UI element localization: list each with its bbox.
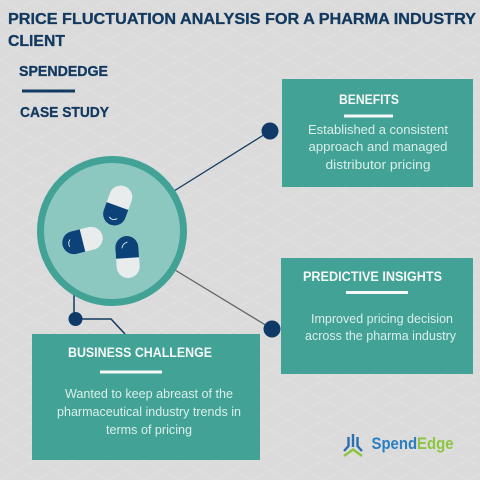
pill: lower — [115, 235, 140, 279]
subtitle: SpendEdge case study — [19, 63, 109, 121]
text: benefits body: approach and managed — [308, 139, 448, 154]
panel: predictive insights — [281, 258, 473, 374]
title: CLIENT — [8, 33, 65, 50]
heading: business challenge: BUSINESS CHALLENGE — [68, 345, 212, 360]
text: benefits body — [308, 122, 448, 172]
text: business challenge body: Wanted to keep abreast of the — [65, 386, 233, 401]
pill: upper — [100, 182, 135, 229]
subtitle: SpendEdge case study: SPENDEDGE — [19, 63, 108, 80]
text: business challenge body: pharmaceutical industry trends in — [57, 404, 241, 419]
text: benefits body: distributor pricing — [326, 157, 430, 172]
text: business challenge body: terms of pricing — [106, 422, 192, 437]
logo: SpendEdge: SpendEdge — [372, 434, 454, 453]
panel: benefits — [282, 79, 473, 187]
title — [8, 11, 476, 50]
text: predictive insights body — [305, 311, 456, 343]
heading: benefits: BENEFITS — [339, 92, 399, 107]
text: predictive insights body: Improved pricing decision — [311, 311, 453, 326]
connector: circle to predictive insights — [175, 270, 280, 338]
text: predictive insights body: across the pharma industry — [305, 328, 456, 343]
text: benefits body: Established a consistent — [308, 122, 448, 137]
panel: business challenge — [32, 334, 260, 460]
text: business challenge body — [57, 386, 241, 437]
connector: circle to benefits — [174, 122, 278, 191]
icon: pills in circle — [40, 160, 184, 302]
connector: circle to business challenge — [68, 295, 125, 334]
subtitle: SpendEdge case study: CASE STUDY — [20, 104, 109, 121]
icon: logo mark — [344, 434, 362, 456]
title: PRICE FLUCTUATION ANALYSIS FOR A PHARMA INDUSTRY — [8, 11, 476, 28]
heading: predictive insights: PREDICTIVE INSIGHTS — [303, 269, 442, 284]
logo: SpendEdge — [344, 434, 454, 456]
pill: left — [60, 224, 105, 257]
